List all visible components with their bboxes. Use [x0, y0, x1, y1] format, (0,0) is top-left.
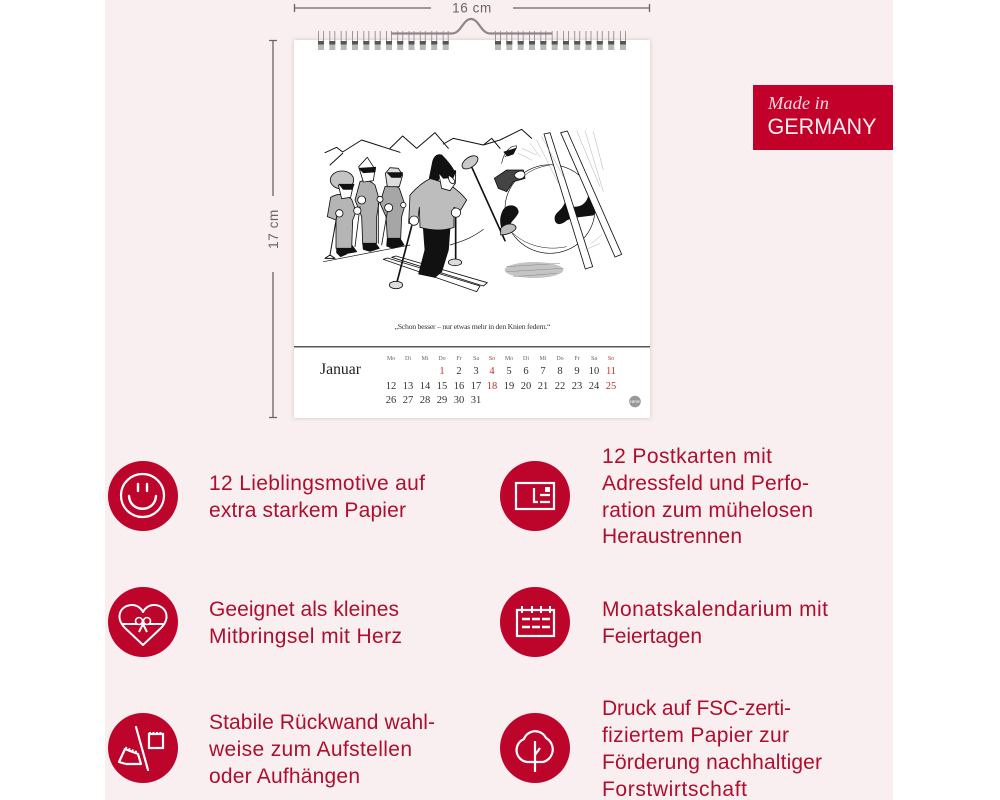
dimension: height 17 cm	[266, 40, 281, 418]
calendar grid: Mo	[387, 356, 395, 362]
calendar grid: 29	[437, 395, 447, 406]
calendar grid: 10	[589, 366, 599, 377]
text: Mitbringsel mit Herz	[209, 625, 402, 648]
calendar grid: 11	[606, 366, 616, 377]
month name: Januar	[320, 361, 362, 378]
calendar grid: 28	[420, 395, 430, 406]
dimension: width 16 cm	[294, 0, 650, 16]
calendar grid: So	[608, 356, 614, 362]
calendar grid: 1	[439, 366, 445, 377]
text: ration zum mühelosen	[602, 499, 813, 522]
calendar grid: 7	[540, 366, 546, 377]
text: weise zum Aufstellen	[208, 738, 412, 761]
text: Druck auf FSC-zerti-	[602, 697, 791, 720]
text	[208, 711, 435, 788]
calendar grid: 15	[437, 381, 447, 392]
calendar grid: 19	[504, 381, 514, 392]
text	[209, 598, 402, 648]
flying pole	[470, 163, 505, 241]
calendar grid: 30	[454, 395, 464, 406]
icon: calendar	[500, 587, 570, 657]
calendar grid: 16	[454, 381, 464, 392]
calendar grid: 8	[557, 366, 563, 377]
calendar grid: Sa	[473, 356, 479, 362]
icon: smiley	[108, 461, 178, 531]
calendar grid: 14	[420, 381, 431, 392]
feature: FSC paper	[500, 697, 822, 800]
calendar grid	[386, 356, 616, 406]
text	[209, 472, 425, 522]
calendar grid: 26	[386, 395, 396, 406]
calendar grid: 17	[471, 381, 481, 392]
calendar grid: 18	[487, 381, 497, 392]
text	[602, 598, 828, 648]
snowball	[505, 165, 595, 253]
text	[602, 697, 822, 800]
text: Förderung nachhaltiger	[602, 751, 822, 774]
icon: tree	[500, 713, 570, 783]
calendar grid: 4	[489, 366, 495, 377]
text: extra starkem Papier	[209, 499, 406, 522]
back skier left	[325, 171, 361, 258]
calendar grid: Fr	[574, 356, 580, 362]
calendar grid: 21	[538, 381, 548, 392]
skis under main skier	[383, 256, 487, 292]
text: oder Aufhängen	[209, 765, 360, 788]
text: Adressfeld und Perfo-	[602, 472, 809, 495]
calendar grid: 13	[403, 381, 413, 392]
calendar grid: 25	[606, 381, 616, 392]
divider	[294, 346, 650, 348]
back skier right	[380, 168, 406, 248]
cartoon: skiers and snowball	[323, 129, 622, 292]
text	[602, 445, 813, 548]
spiral binding	[318, 19, 626, 50]
icon: postcard	[500, 461, 570, 531]
text: Feiertagen	[602, 625, 702, 648]
text: Heraustrennen	[602, 525, 742, 548]
publisher logo: HEYE	[630, 400, 640, 404]
calendar grid: Mi	[421, 356, 429, 362]
badge: Made in Germany: Made in	[767, 93, 829, 113]
calendar grid: 3	[473, 366, 479, 377]
dimension: height 17 cm: 17 cm	[266, 209, 281, 249]
icon: stand and hang	[108, 713, 178, 783]
calendar grid: 23	[572, 381, 582, 392]
calendar grid: 27	[403, 395, 413, 406]
calendar grid: Mo	[505, 356, 513, 362]
dimension: width 16 cm: 16 cm	[452, 0, 492, 16]
feature: gift	[108, 587, 402, 657]
calendar grid: 22	[555, 381, 565, 392]
mountains	[325, 129, 532, 165]
text: 12 Postkarten mit	[602, 445, 772, 468]
feature: backboard	[108, 711, 435, 788]
calendar grid: 5	[506, 366, 512, 377]
calendar grid: So	[489, 356, 495, 362]
text: Monatskalendarium mit	[602, 598, 828, 621]
calendar grid: Di	[523, 356, 529, 362]
calendar grid: 2	[456, 366, 462, 377]
calendar grid: 31	[471, 395, 481, 406]
badge: Made in Germany: GERMANY	[768, 114, 877, 139]
calendar grid: Sa	[591, 356, 597, 362]
feature: motifs	[108, 461, 425, 531]
caption: „Schon besser – nur etwas mehr in den Knien federn.“	[394, 322, 551, 331]
ski poles	[397, 218, 456, 283]
calendar grid: Di	[405, 356, 411, 362]
calendar grid: Do	[438, 356, 446, 362]
calendar grid: 9	[574, 366, 580, 377]
text: Stabile Rückwand wahl-	[209, 711, 435, 734]
calendar grid: Fr	[456, 356, 462, 362]
calendar grid: 20	[521, 381, 531, 392]
back skier middle	[355, 157, 383, 251]
feature: postcards	[500, 445, 813, 548]
main skier	[389, 155, 467, 289]
calendar grid: 6	[523, 366, 529, 377]
shadow on snow	[505, 262, 563, 278]
text: 12 Lieblingsmotive auf	[209, 472, 425, 495]
calendar	[294, 19, 650, 418]
feature: monthly calendar	[500, 587, 828, 657]
calendar grid: Do	[556, 356, 564, 362]
tumbling skier	[494, 170, 525, 192]
calendar grid: 12	[386, 381, 396, 392]
skis on snowball	[544, 133, 593, 269]
text: Geeignet als kleines	[209, 598, 399, 621]
calendar grid: Mi	[539, 356, 547, 362]
icon: heart with bow	[108, 587, 178, 657]
text: fiziertem Papier zur	[602, 724, 789, 747]
badge: Made in Germany	[753, 85, 893, 150]
motion lines	[518, 131, 603, 250]
slope lines	[323, 229, 483, 262]
publisher logo	[629, 396, 641, 407]
calendar grid: 24	[589, 381, 600, 392]
